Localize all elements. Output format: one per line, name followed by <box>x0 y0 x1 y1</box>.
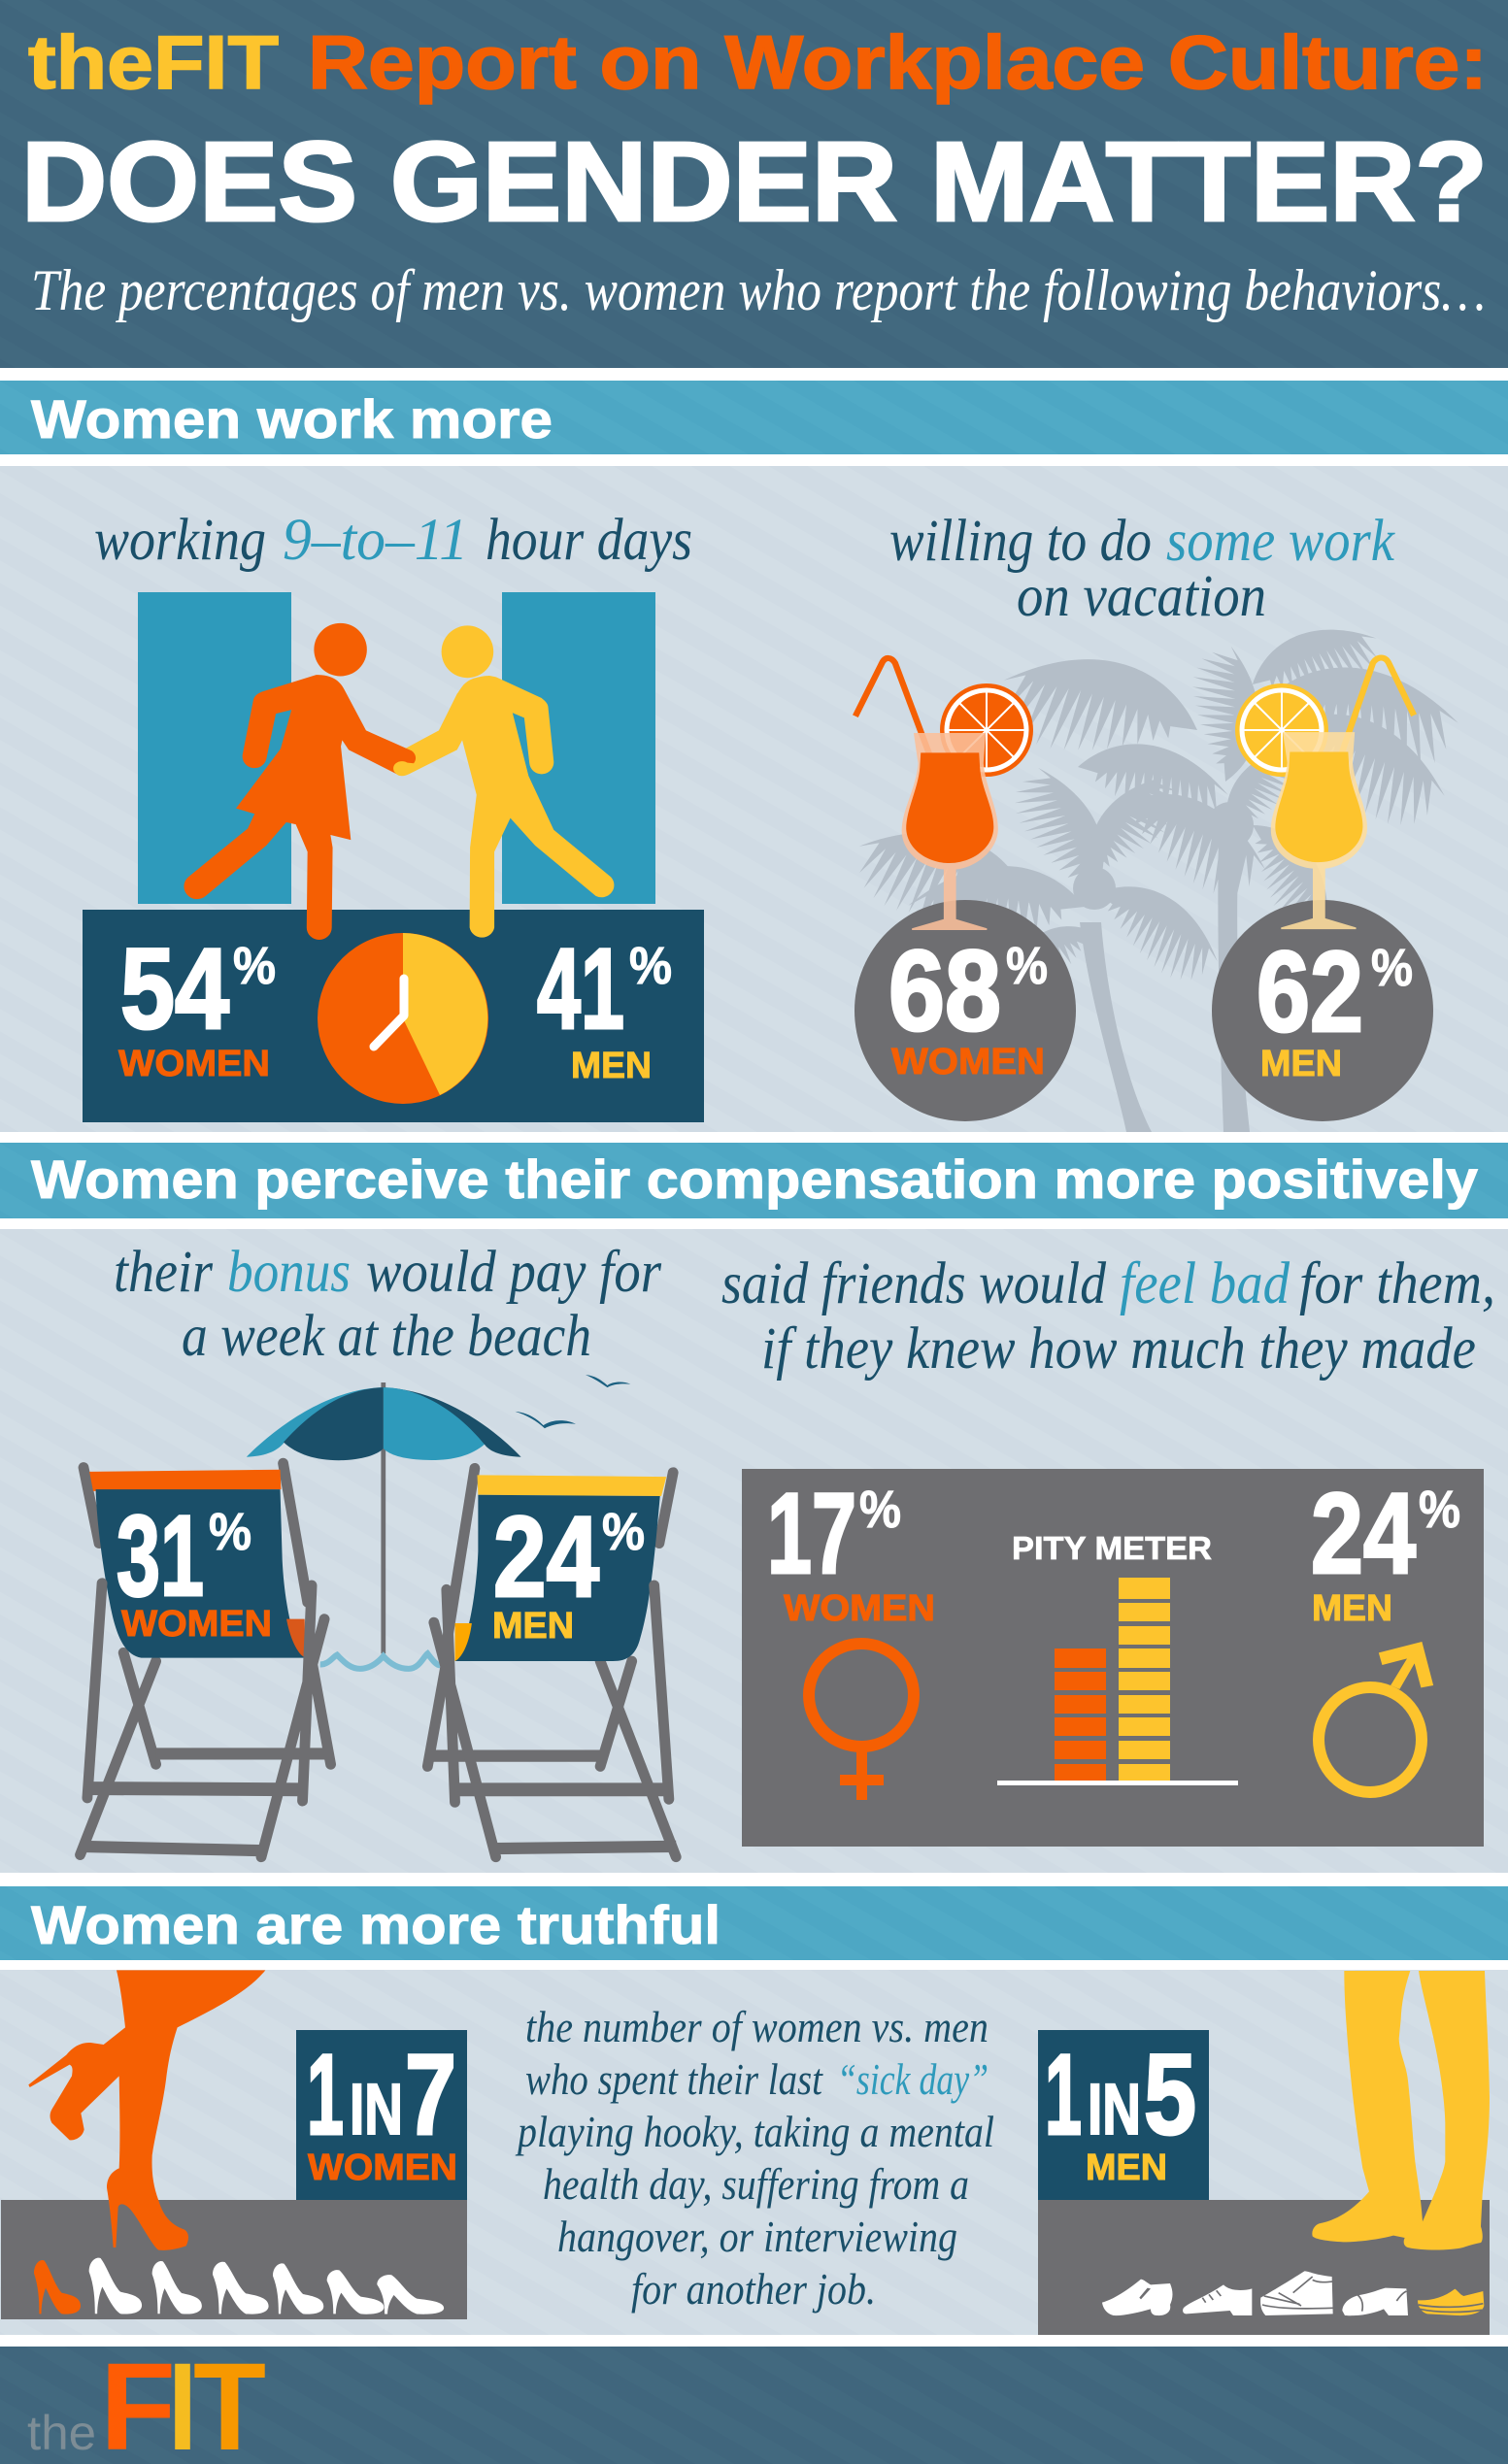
icon: umbrella <box>247 1382 521 1653</box>
women floor box <box>1 2200 467 2319</box>
text block: sick day description: health day, suffering from a <box>543 2160 969 2209</box>
title line: report on workplace culture: Report on Workplace Culture: <box>308 19 1488 105</box>
women stat box: 1 <box>307 2031 344 2159</box>
women stat box: 7 <box>405 2031 456 2159</box>
text block: sick day description: “sick day” <box>837 2055 989 2104</box>
tagline: friends feel bad <box>721 1251 1495 1382</box>
stat: 24% men <box>1311 1470 1460 1629</box>
section band: compensation <box>0 1143 1508 1218</box>
icon: palm trees <box>841 603 1459 1132</box>
stat: 54% women <box>118 925 276 1084</box>
tagline: bonus <box>114 1240 661 1369</box>
stat: 24% men: % <box>602 1503 645 1561</box>
stat: 41% men: MEN <box>571 1046 652 1086</box>
tagline: bonus: would pay for <box>366 1240 661 1305</box>
tagline: friends feel bad: for them, <box>1299 1251 1495 1316</box>
men stat box: 1 <box>1045 2031 1082 2159</box>
tagline: working hours: hour days <box>486 508 692 573</box>
men floor box <box>1038 2200 1490 2335</box>
icon: man's legs <box>1312 1971 1490 2249</box>
icon: orange cocktail <box>855 658 998 930</box>
tagline: bonus: their <box>114 1240 213 1305</box>
stat: 24% men: MEN <box>1312 1588 1392 1629</box>
stat: 62% men <box>1257 928 1413 1084</box>
text block: sick day description: who spent their last <box>525 2055 823 2104</box>
tagline: friends feel bad: said friends would <box>721 1251 1106 1316</box>
men stat box <box>1038 2030 1209 2200</box>
stat: 68% women <box>888 927 1048 1082</box>
icon: man and woman shaking hands <box>184 623 614 940</box>
section heading: Women work more <box>31 388 553 450</box>
stat: 24% men: MEN <box>492 1606 574 1647</box>
stat: 24% men <box>492 1493 645 1647</box>
tagline: working hours: 9–to–11 <box>283 508 468 573</box>
title line: theFIT: theFIT <box>28 19 279 105</box>
illustration: beach chairs and umbrella <box>81 1375 676 1857</box>
stat: 62% men: % <box>1371 939 1413 997</box>
icon: birds <box>516 1375 630 1428</box>
icon: right deck chair <box>427 1468 676 1857</box>
stat: 17% women <box>767 1470 935 1629</box>
text block: sick day description: for another job. <box>631 2265 876 2314</box>
section band: women work more <box>0 381 1508 454</box>
icon: woman's legs in heels <box>28 1970 265 2250</box>
text block: sick day description: the number of women vs. men <box>525 2003 989 2051</box>
logo: theFIT: the <box>27 2406 96 2460</box>
text block: sick day description: playing hooky, taking a mental <box>515 2108 994 2156</box>
icon: left deck chair <box>81 1463 331 1857</box>
icon: row of heels, one highlighted <box>34 2258 444 2314</box>
text block: sick day description <box>515 2003 994 2314</box>
men stat box: IN <box>1088 2069 1141 2149</box>
stat: 41% men: 41 <box>537 925 624 1053</box>
stat circle: women <box>855 900 1076 1121</box>
stat: 68% women: % <box>1006 937 1048 995</box>
section heading: Women are more truthful <box>31 1894 720 1955</box>
tagline: working hours <box>94 508 692 573</box>
bar chart: pity meter <box>997 1578 1238 1785</box>
section heading: Women perceive their compensation more positively <box>31 1149 1478 1210</box>
blue bar right <box>502 592 655 904</box>
main heading: DOES GENDER MATTER? <box>21 118 1488 245</box>
tagline: working hours: working <box>94 508 266 573</box>
stat: 31% women <box>117 1492 272 1645</box>
section band: truthful <box>0 1886 1508 1960</box>
tagline: work on vacation: on vacation <box>1017 564 1266 629</box>
stat: 68% women: WOMEN <box>891 1042 1045 1082</box>
panel: women work more <box>0 466 1508 1132</box>
header banner <box>0 0 1508 368</box>
icon: male symbol <box>1319 1642 1433 1792</box>
stat: 24% men: 24 <box>1311 1470 1416 1598</box>
panel: pity meter <box>742 1469 1484 1847</box>
stat: 62% men: 62 <box>1257 928 1363 1056</box>
icon: yellow cocktail <box>1271 657 1414 929</box>
stat: 24% men: % <box>1419 1481 1460 1539</box>
panel: compensation <box>0 1229 1508 1873</box>
tagline: work on vacation: some work <box>1166 509 1395 574</box>
stat: 24% men: 24 <box>493 1493 599 1621</box>
icon: wave <box>320 1653 440 1669</box>
tagline: friends feel bad: feel bad <box>1120 1251 1290 1316</box>
women stat box: IN <box>350 2069 403 2149</box>
stat: 31% women: WOMEN <box>121 1604 272 1645</box>
icon: row of men's shoes, one highlighted <box>1102 2271 1484 2315</box>
icon: female symbol <box>809 1644 914 1800</box>
stat: 17% women: WOMEN <box>784 1588 935 1629</box>
tagline: work on vacation: willing to do <box>889 509 1152 574</box>
tagline: work on vacation <box>889 509 1395 629</box>
text block: sick day description: hangover, or interviewing <box>557 2213 957 2261</box>
stat: 17% women: 17 <box>767 1470 856 1598</box>
stat: 54% women: % <box>233 937 276 995</box>
icon: orange slice <box>940 683 1033 777</box>
chart: handshake figures and clock <box>83 592 704 1122</box>
stat circle: men <box>1212 900 1433 1121</box>
pity meter heading: PITY METER <box>1012 1530 1212 1566</box>
stat: 17% women: % <box>859 1481 901 1539</box>
stat: 68% women: 68 <box>888 927 1001 1055</box>
stat: 62% men: MEN <box>1260 1044 1342 1084</box>
icon: lemon slice <box>1235 683 1328 777</box>
logo: theFIT <box>27 2338 266 2464</box>
blue bar left <box>138 592 291 904</box>
stat: 31% women: 31 <box>117 1492 204 1620</box>
pie chart clock <box>318 933 488 1104</box>
women stat box: WOMEN <box>308 2148 457 2188</box>
men stat box: 5 <box>1144 2031 1196 2159</box>
men stat box: MEN <box>1086 2148 1167 2188</box>
women stat box <box>296 2030 467 2200</box>
panel: truthful <box>0 1970 1508 2335</box>
tagline: bonus: bonus <box>227 1240 351 1305</box>
stat: 31% women: % <box>209 1503 251 1561</box>
stat: 54% women: WOMEN <box>118 1044 270 1084</box>
tagline: bonus: a week at the beach <box>182 1304 591 1369</box>
stat: 41% men: % <box>629 937 672 995</box>
footer <box>0 2338 1508 2464</box>
stat: 54% women: 54 <box>120 925 229 1053</box>
stat box <box>83 910 704 1122</box>
